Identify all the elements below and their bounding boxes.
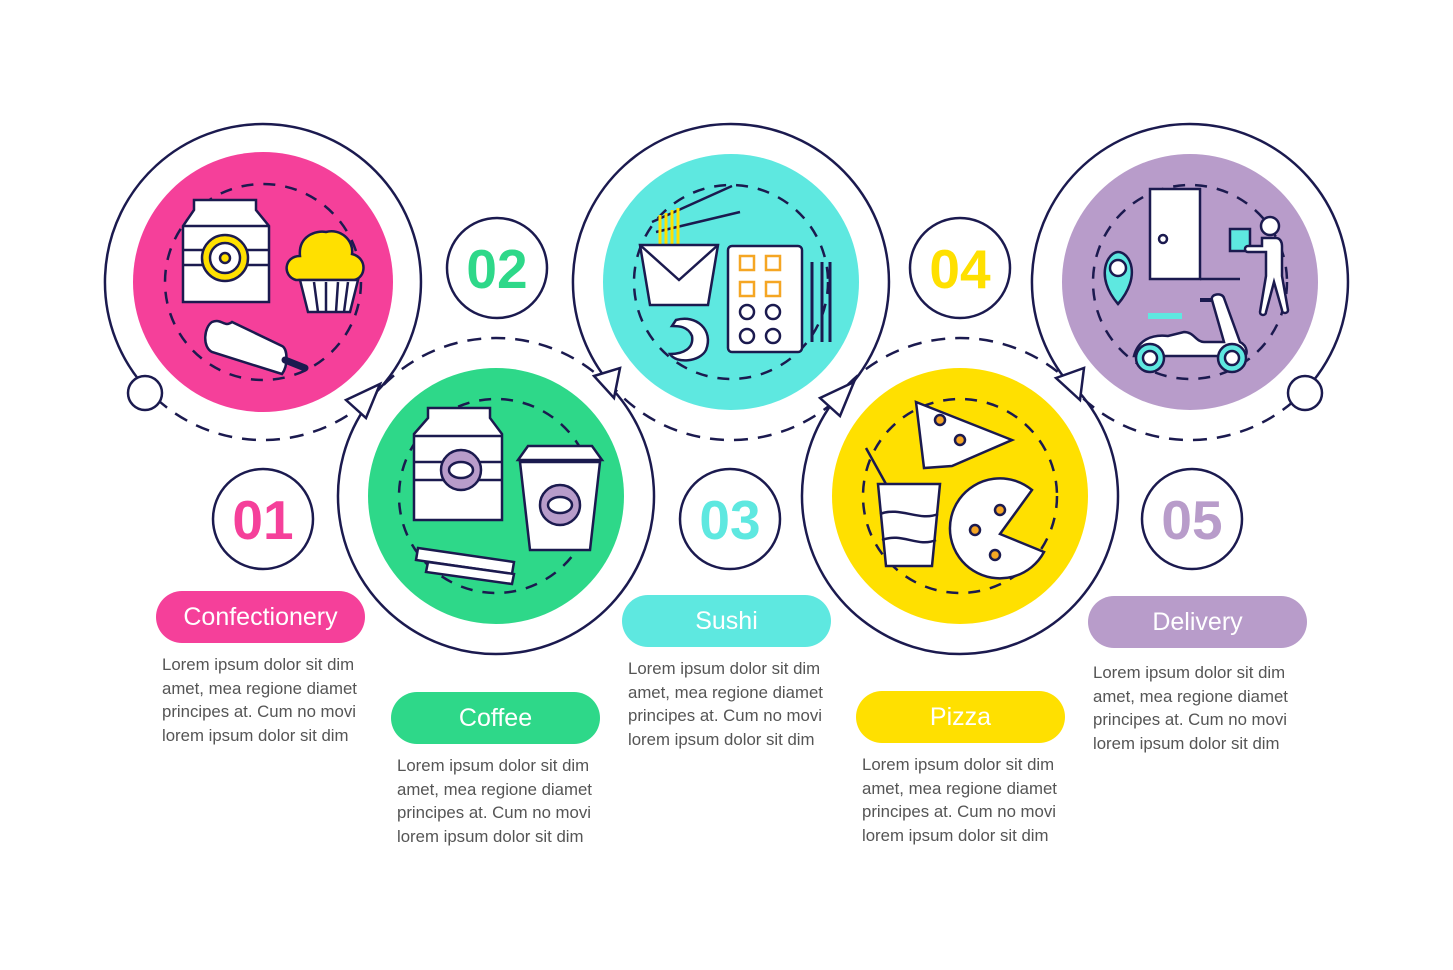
label: Confectionery: Confectionery xyxy=(183,603,338,631)
label: Coffee: Coffee xyxy=(459,704,532,732)
number 05: 05 xyxy=(1161,489,1223,551)
label: Sushi: Sushi xyxy=(695,607,758,635)
label: Coffee xyxy=(391,692,600,744)
text: step 2: Lorem ipsum dolor sit dim amet, mea regione diamet principes at. Cum no movi lorem ipsum dolor sit dim xyxy=(397,756,592,846)
text: step 1: Lorem ipsum dolor sit dim amet, mea regione diamet principes at. Cum no movi lorem ipsum dolor sit dim xyxy=(162,655,357,744)
label: Confectionery xyxy=(156,591,365,643)
label: Delivery xyxy=(1088,596,1307,648)
text: step 4: Lorem ipsum dolor sit dim amet, mea regione diamet principes at. Cum no movi lorem ipsum dolor sit dim xyxy=(862,755,1057,844)
number 04 xyxy=(910,218,1010,318)
number 05 xyxy=(1142,469,1242,569)
number 01: 01 xyxy=(232,489,294,551)
number 02 xyxy=(447,218,547,318)
number 01 xyxy=(213,469,313,569)
circle: pizza xyxy=(832,368,1088,624)
number 04: 04 xyxy=(929,238,991,300)
label: Pizza xyxy=(856,691,1065,743)
ring: step 1 xyxy=(105,124,421,440)
number 02: 02 xyxy=(466,238,528,300)
arrow 2 xyxy=(594,368,620,398)
number 03: 03 xyxy=(699,489,761,551)
circle: sushi xyxy=(603,154,859,410)
ring: step 2 xyxy=(338,338,654,654)
ring: step 4 xyxy=(802,338,1118,654)
circle: coffee xyxy=(368,368,624,624)
circle: delivery xyxy=(1062,154,1318,410)
arrow 3 xyxy=(820,382,854,416)
text: step 3: Lorem ipsum dolor sit dim amet, mea regione diamet principes at. Cum no movi lorem ipsum dolor sit dim xyxy=(628,659,823,748)
ring: step 5 xyxy=(1032,124,1348,440)
label: Pizza: Pizza xyxy=(930,703,991,731)
label: Delivery: Delivery xyxy=(1152,608,1243,636)
arrow 4 xyxy=(1056,368,1084,400)
ring: step 3 xyxy=(573,124,889,440)
text: step 5: Lorem ipsum dolor sit dim amet, mea regione diamet principes at. Cum no movi lorem ipsum dolor sit dim xyxy=(1093,663,1288,752)
label: Sushi xyxy=(622,595,831,647)
number 03 xyxy=(680,469,780,569)
circle: confectionery xyxy=(133,152,393,412)
arrow 1 xyxy=(346,384,380,418)
